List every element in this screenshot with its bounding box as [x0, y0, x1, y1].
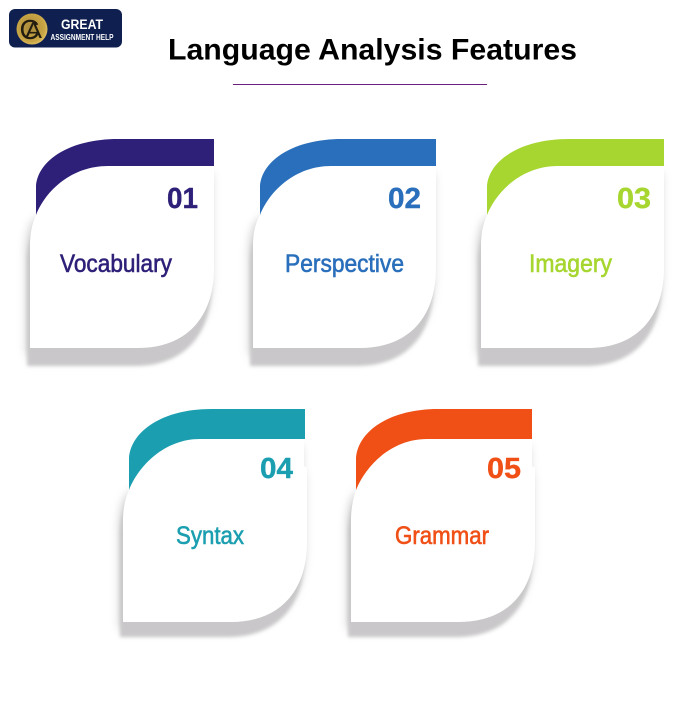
number: 01	[167, 183, 198, 215]
label: Vocabulary	[60, 250, 172, 278]
logo	[9, 9, 122, 48]
title: Language Analysis Features	[168, 34, 577, 66]
band	[487, 139, 664, 215]
label: Grammar	[395, 522, 489, 550]
band	[129, 409, 305, 490]
label: Perspective	[285, 250, 404, 278]
icon: logo emblem: C	[20, 14, 40, 45]
icon: logo emblem	[16, 14, 48, 45]
label: Syntax	[176, 522, 244, 550]
panel: 03 Imagery	[478, 139, 664, 366]
divider	[233, 84, 487, 85]
panel: 05 Grammar	[348, 409, 535, 637]
band	[356, 409, 532, 490]
number: 02	[388, 183, 421, 215]
label: Imagery	[529, 250, 612, 278]
number: 05	[487, 453, 521, 485]
panel: 02 Perspective	[250, 139, 436, 366]
logo text	[50, 17, 114, 42]
band	[260, 139, 436, 215]
band	[36, 139, 214, 215]
number: 04	[260, 453, 293, 485]
logo text: GREAT	[61, 17, 104, 32]
panel: 01 Vocabulary	[27, 139, 214, 366]
number: 03	[617, 183, 651, 215]
logo text: ASSIGNMENT HELP	[50, 33, 114, 42]
panel: 04 Syntax	[120, 409, 307, 637]
icon: logo emblem: A	[25, 18, 42, 43]
